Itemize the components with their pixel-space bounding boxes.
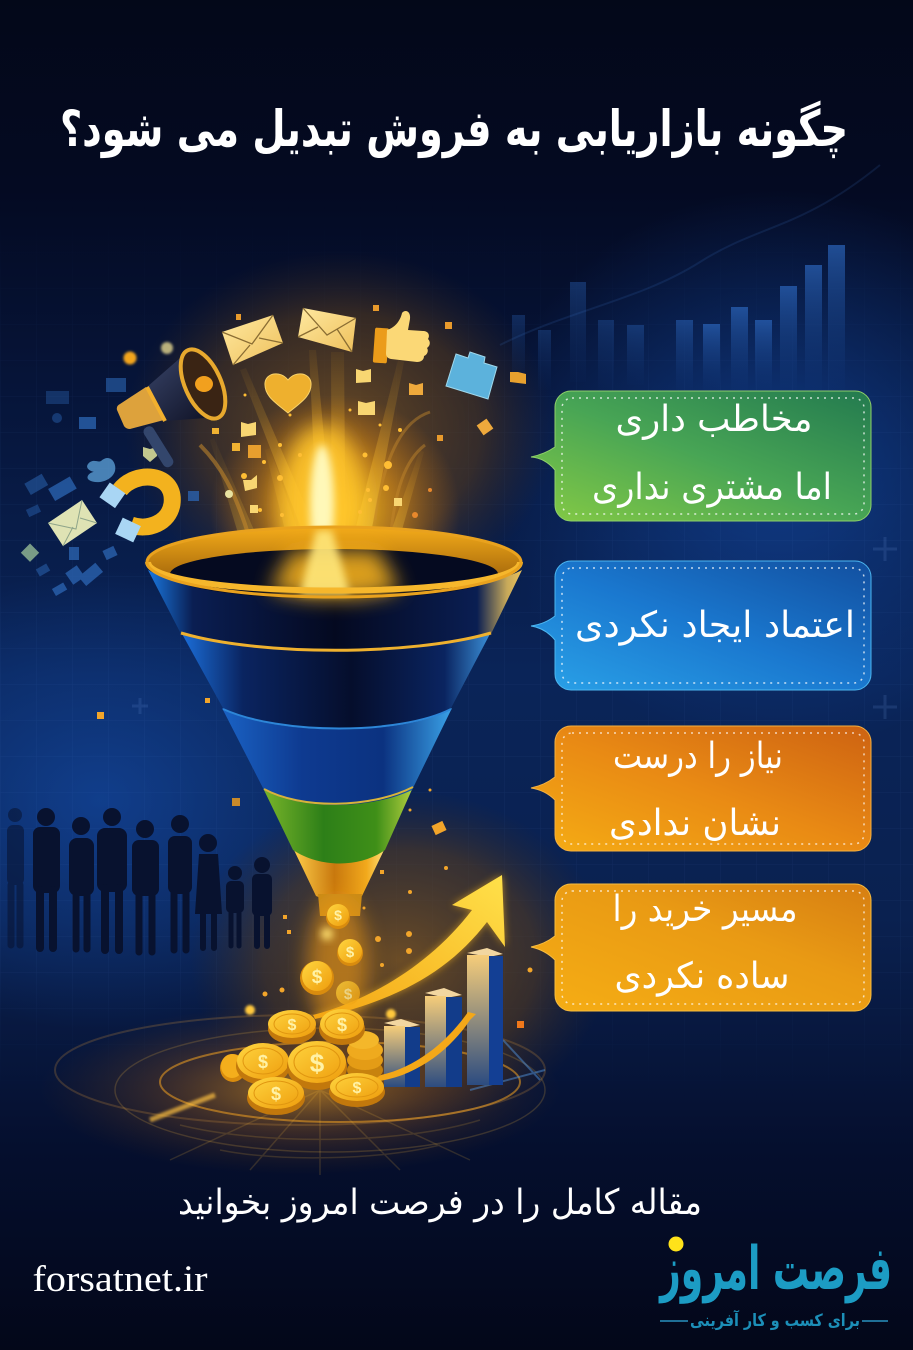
floating squares left <box>21 378 199 596</box>
callout text: orange line 2: نشان ندادی <box>609 803 781 844</box>
icon: envelope 2 <box>298 308 356 352</box>
coin: falling 4: $ <box>344 986 353 1003</box>
crowd silhouettes <box>7 808 272 952</box>
logo <box>658 1234 892 1331</box>
funnel separators <box>181 633 491 804</box>
funnel band: gold spout <box>293 848 385 916</box>
panel: blue callout <box>531 561 871 690</box>
icon: briefcase <box>446 352 497 399</box>
coin: pile 6 <box>329 1073 385 1107</box>
call to action text: مقاله کامل را در فرصت امروز بخوانید <box>178 1183 702 1223</box>
icon: left envelope <box>48 500 97 546</box>
coin: pile 1: $ <box>288 1017 297 1034</box>
callout text: blue: اعتماد ایجاد نکردی <box>575 605 855 646</box>
funnel <box>147 527 522 916</box>
funnel band: green <box>263 785 414 864</box>
coin: falling 1 <box>326 904 350 929</box>
falling coins stream <box>97 698 532 1035</box>
coin: pile 4 <box>236 1043 290 1085</box>
coin: pile 4: $ <box>258 1052 268 1072</box>
logo tagline: برای کسب و کار آفرینی <box>690 1309 860 1331</box>
funnel band: blue <box>222 708 452 805</box>
coin: pile 2 <box>319 1009 365 1045</box>
coin: pile 3 <box>220 1054 246 1082</box>
coin: pile 7 <box>247 1077 305 1115</box>
coin: pile 1 <box>268 1010 316 1044</box>
callout text: green line 2: اما مشتری نداری <box>592 467 832 508</box>
coin: pile 5 <box>287 1041 347 1090</box>
panel: amber callout <box>531 884 871 1011</box>
sparks <box>124 305 452 518</box>
coin stack <box>347 1031 383 1080</box>
background plus marks <box>132 537 897 719</box>
callout text: amber line 2: ساده نکردی <box>614 956 790 997</box>
funnel band: navy <box>181 632 491 730</box>
coin: falling 3 <box>300 961 334 995</box>
rays and sparks above funnel <box>200 350 430 590</box>
bar chart: growth bars <box>384 948 503 1087</box>
arrow: small growth arrow <box>370 1012 476 1082</box>
funnel rim <box>147 527 521 599</box>
coin: falling 2 <box>337 939 363 966</box>
coin: pile 7: $ <box>271 1084 281 1104</box>
coin: falling 1: $ <box>334 907 342 923</box>
coin: falling 3: $ <box>312 967 323 988</box>
small yellow cards <box>143 369 526 513</box>
background bar chart <box>500 165 880 392</box>
arrow: big growth arrow <box>313 875 505 1019</box>
coin: pile 6: $ <box>353 1080 362 1097</box>
callout text: amber line 1: مسیر خرید را <box>612 889 798 930</box>
coin: pile 5: $ <box>310 1048 325 1078</box>
panel: green callout <box>531 391 871 521</box>
website url: forsatnet.ir <box>32 1259 208 1300</box>
coin: falling 4 <box>336 981 360 1005</box>
floor rings <box>55 1015 545 1175</box>
coin: pile 2: $ <box>337 1015 347 1035</box>
callout text: green line 1: مخاطب داری <box>616 399 812 440</box>
panel: orange callout <box>531 726 871 851</box>
icon: heart <box>265 374 311 413</box>
icon: megaphone <box>117 343 234 469</box>
gold coins <box>220 904 385 1115</box>
coin: falling 2: $ <box>346 944 355 961</box>
callout text: orange line 1: نیاز را درست <box>613 736 783 777</box>
icon: thumbs up <box>373 311 430 363</box>
icon: magnet <box>99 477 172 542</box>
funnel band: black top <box>148 570 522 651</box>
icon: envelope 1 <box>222 315 283 365</box>
